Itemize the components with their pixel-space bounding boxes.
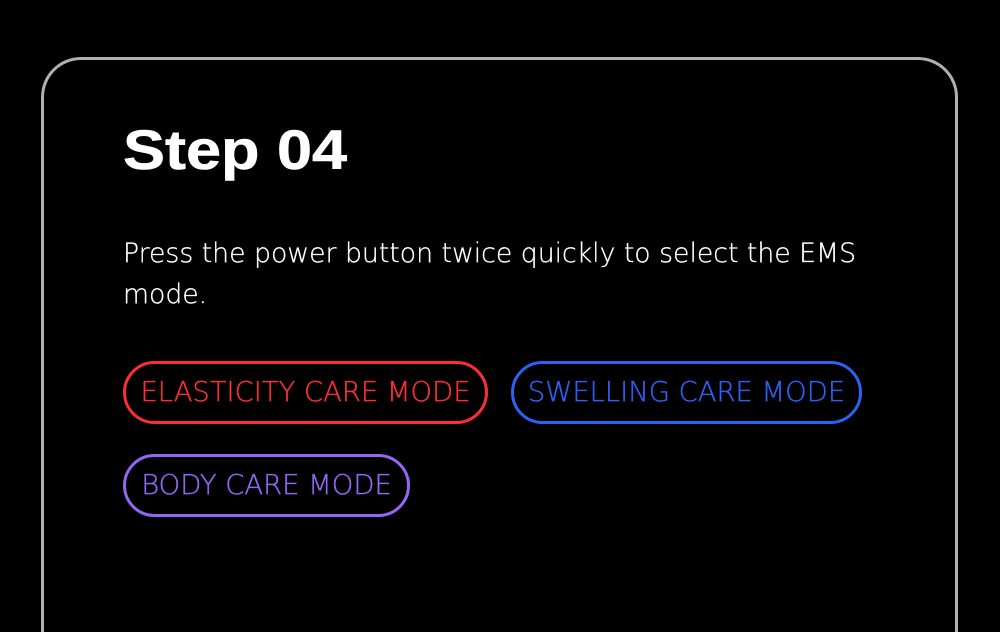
button: swelling care mode — [511, 361, 862, 424]
heading: Step 04: Step 04 — [123, 118, 347, 181]
button: body care mode — [123, 454, 410, 517]
button: elasticity care mode: ELASTICITY CARE MODE — [140, 377, 470, 408]
button: elasticity care mode — [123, 361, 488, 424]
button: body care mode: BODY CARE MODE — [141, 470, 392, 501]
text block: instruction: mode. — [123, 279, 207, 310]
button: swelling care mode: SWELLING CARE MODE — [528, 377, 845, 408]
text block: instruction — [123, 238, 856, 310]
text block: instruction: Press the power button twice quickly to select the EMS — [123, 238, 856, 269]
